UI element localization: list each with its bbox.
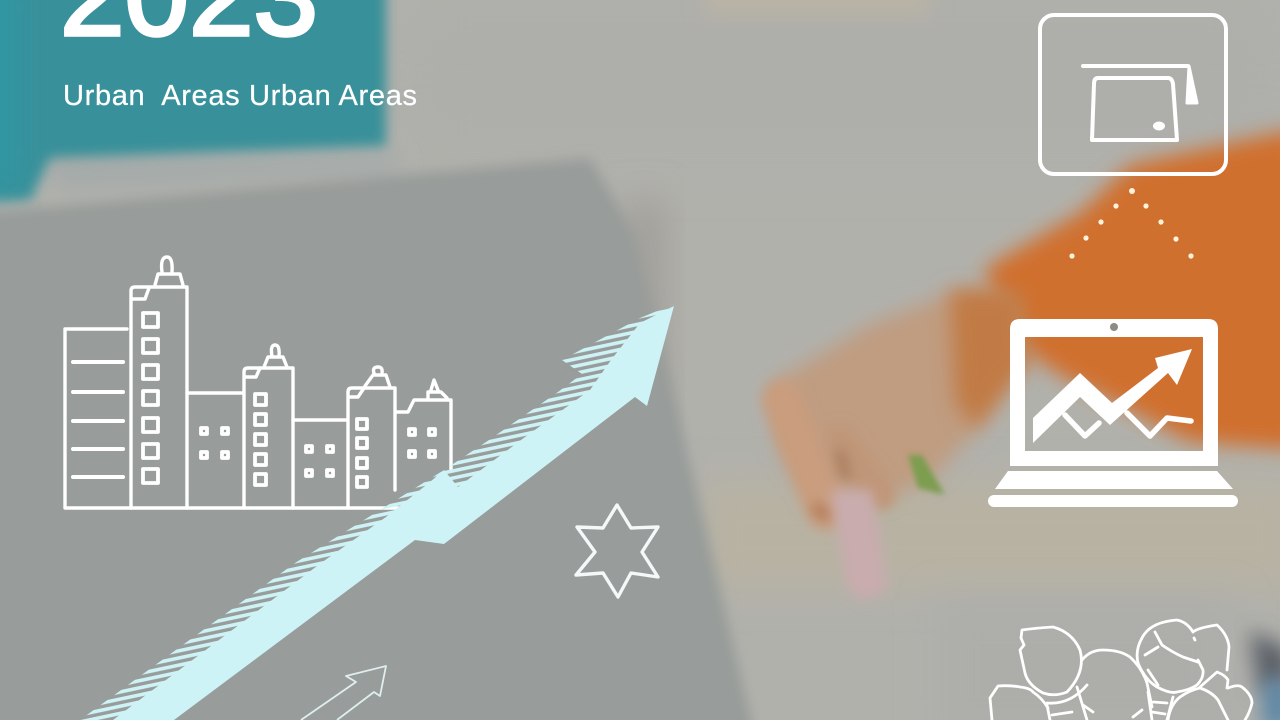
icon: tablet in rounded frame: [1040, 15, 1226, 174]
dotted connector: [1069, 188, 1194, 259]
icon: group of people: [990, 620, 1252, 720]
icon: city skyline: [65, 257, 451, 508]
large rising arrow: [80, 304, 674, 720]
icon: star outline: [576, 505, 658, 597]
icon: small outline arrow: [301, 666, 386, 720]
icon: laptop with growth chart: [988, 319, 1238, 507]
subtitle: Urban Areas Urban Areas: [63, 80, 417, 112]
